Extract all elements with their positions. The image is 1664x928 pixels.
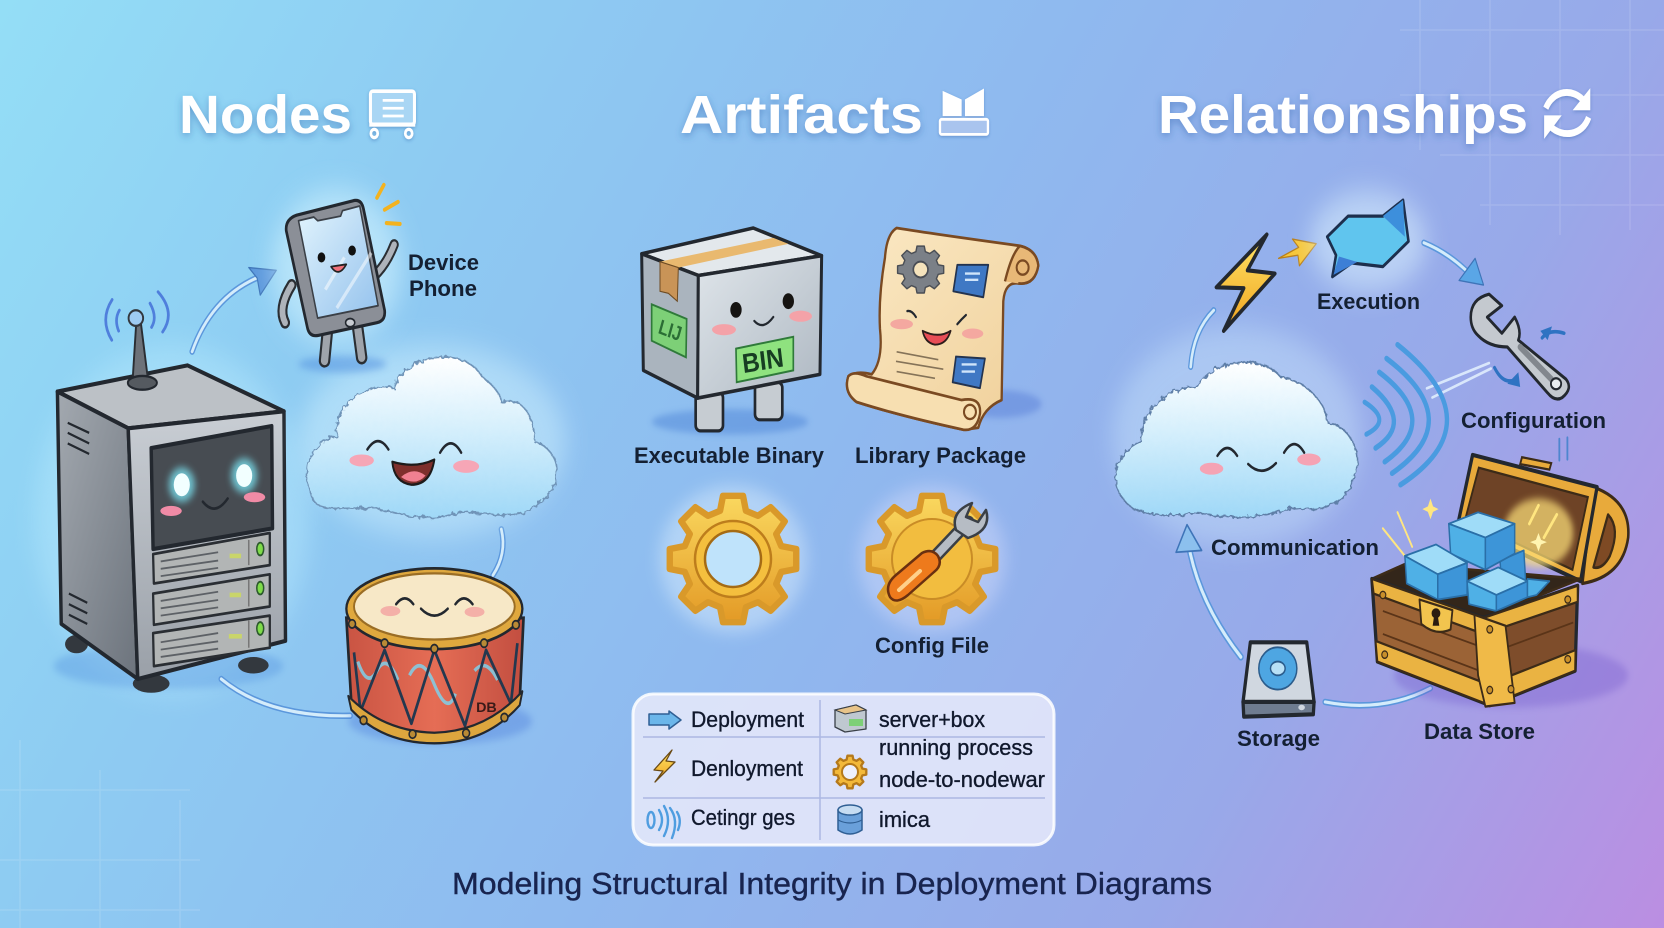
title text: Nodes: Nodes [179, 85, 352, 145]
label: Execution: Execution [1317, 289, 1420, 314]
icon: executable binary box: BIN [740, 342, 785, 379]
icon: antenna [106, 292, 168, 390]
server glow [34, 345, 310, 694]
legend icon: signal waves [648, 806, 680, 838]
icon: open book on a box [940, 88, 988, 134]
connection: server to drum [221, 679, 350, 716]
connection: storage to chest [1325, 688, 1430, 705]
icon: execution crystal [1310, 191, 1427, 292]
panel: legend [633, 694, 1054, 845]
heading: Relationships [1158, 85, 1590, 145]
panel: artifacts [642, 228, 1042, 434]
legend icon: gear [834, 756, 866, 788]
label: Configuration: Configuration [1461, 408, 1606, 433]
legend label: running process: running process [879, 735, 1033, 760]
icon: storage disk [1243, 642, 1314, 717]
icon: sync arrows [1545, 90, 1590, 137]
arrow: execution to configuration [1424, 243, 1484, 285]
legend icon: deployment arrow [649, 711, 681, 729]
icon: executable binary box: LIJ [656, 315, 684, 346]
label: Communication: Communication [1211, 535, 1379, 560]
icon: gear with wrench and screwdriver [858, 485, 1006, 633]
icon: signal waves [1365, 345, 1491, 485]
title text: Relationships: Relationships [1158, 85, 1528, 145]
icon: wrench [1471, 294, 1569, 399]
icon: treasure chest data store [1372, 455, 1628, 707]
legend label: Cetingr ges: Cetingr ges [691, 805, 795, 830]
label: Storage: Storage [1237, 726, 1320, 751]
icon: executable binary box [642, 228, 822, 434]
subtitle: Modeling Structural Integrity in Deployment Diagrams [452, 866, 1212, 901]
icon: library package scroll [847, 228, 1042, 430]
legend label: node-to-nodewar: node-to-nodewar [879, 767, 1045, 792]
icon: phone character [272, 185, 402, 372]
label: Data Store: Data Store [1424, 719, 1535, 744]
connection: configuration to chest [1559, 437, 1567, 460]
panel: relationships [1112, 191, 1628, 717]
legend label: Deployment: Deployment [691, 707, 804, 732]
legend icon: database [838, 805, 862, 834]
arrow: cloud to lightning [1191, 310, 1214, 367]
server shadow [54, 643, 283, 689]
legend icon: lightning [654, 750, 675, 782]
label: Phone: Phone [409, 276, 477, 301]
heading: Artifacts [680, 85, 988, 145]
arrow: storage to cloud [1176, 525, 1241, 657]
legend background [633, 694, 1054, 845]
icon: drum database [346, 568, 532, 744]
icon: drum database: DB [476, 699, 497, 715]
title text: Artifacts: Artifacts [680, 85, 923, 145]
icon: cloud character [307, 357, 557, 518]
icon: server [57, 365, 285, 693]
label: Device: Device [408, 250, 479, 275]
label: Library Package: Library Package [855, 443, 1026, 468]
arrow: lightning to execution [1279, 239, 1316, 266]
cloud glow [299, 345, 566, 538]
panel glow [1112, 326, 1361, 547]
legend label: Denloyment: Denloyment [691, 756, 803, 781]
label: Executable Binary: Executable Binary [634, 443, 825, 468]
heading: Nodes [179, 85, 415, 145]
icon: cloud character [1116, 362, 1357, 517]
legend label: server+box: server+box [879, 707, 985, 732]
legend label: imica: imica [879, 807, 931, 832]
icon: lightning bolt [1216, 234, 1275, 331]
legend icon: server box [835, 705, 866, 732]
icon: gear running process [659, 485, 807, 633]
connection: cloud to drum [493, 529, 503, 575]
arrow: server to phone [192, 268, 276, 352]
label: Config File: Config File [875, 633, 989, 658]
icon: node server cart [369, 91, 415, 138]
panel: nodes [34, 185, 566, 744]
